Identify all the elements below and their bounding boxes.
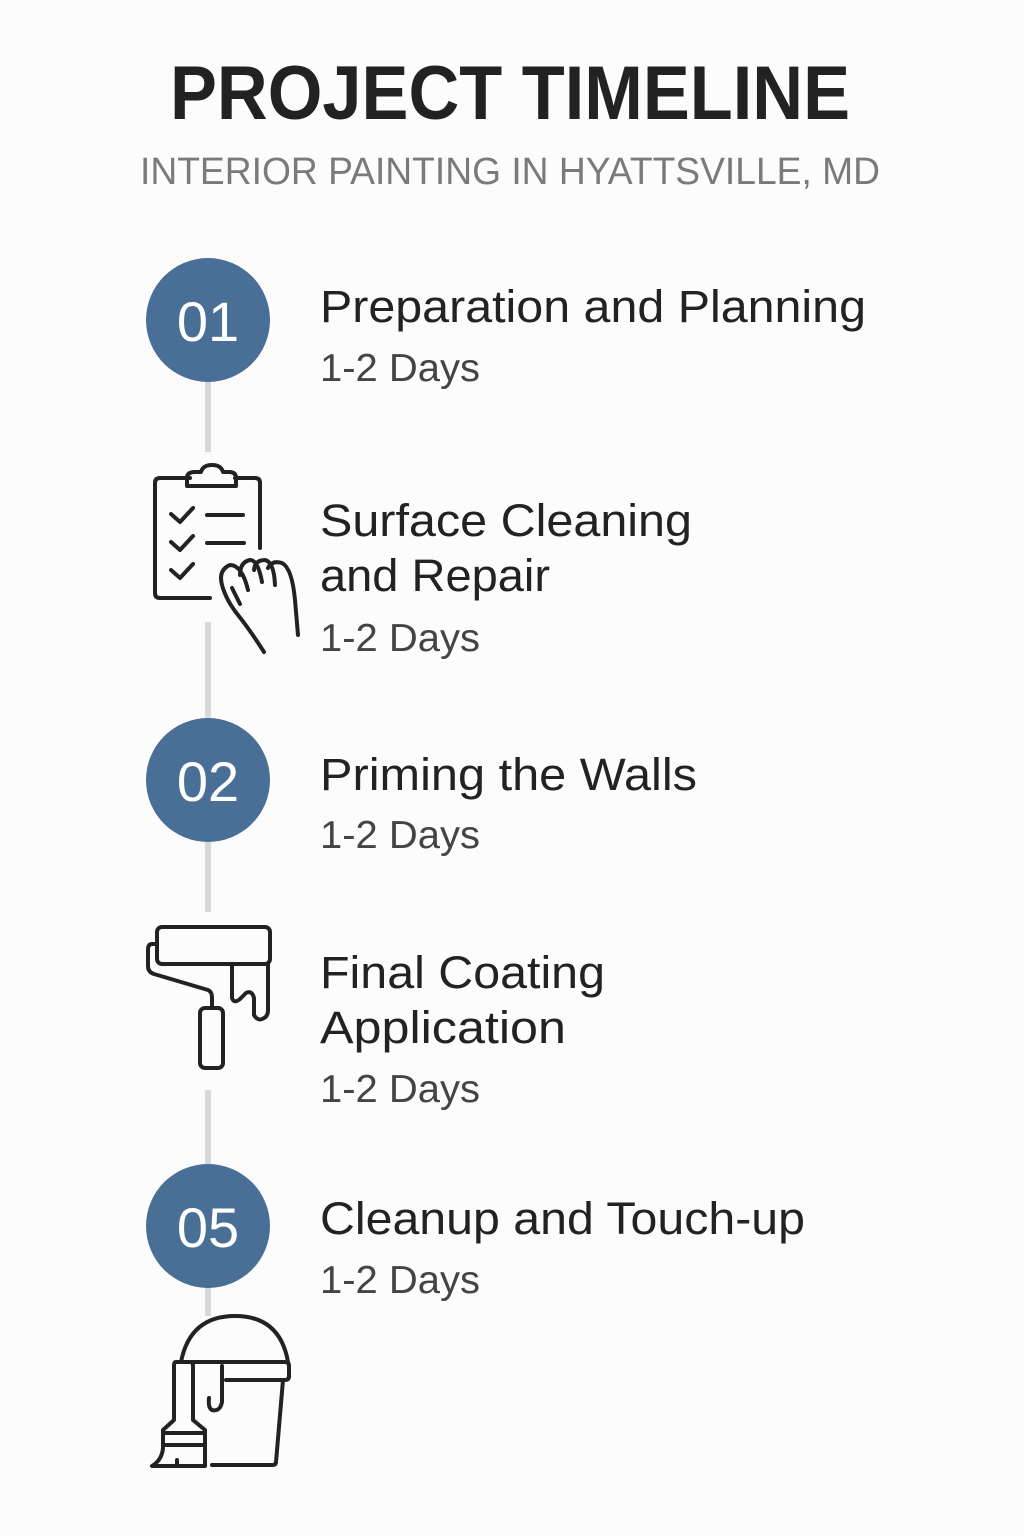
step 03 text: Final Coating Application <box>320 947 605 1111</box>
step 02 text: Surface Cleaning and Repair: and Repair <box>320 550 550 601</box>
step 02 text: Surface Cleaning and Repair <box>320 495 692 660</box>
step 02 text: Priming the Walls: Priming the Walls <box>320 749 697 800</box>
step 02 text: Priming the Walls: 1-2 Days <box>320 814 480 857</box>
timeline connector lines <box>205 380 211 1316</box>
step 05 text: Cleanup and Touch-up <box>320 1193 805 1244</box>
step 02 text: Surface Cleaning and Repair: Surface Cleaning <box>320 495 692 546</box>
title: PROJECT TIMELINE <box>170 51 850 136</box>
step 01 badge: 01 <box>177 290 239 353</box>
step 03 text: Final Coating Application: Application <box>320 1002 566 1053</box>
step 05 text: 1-2 Days <box>320 1259 480 1302</box>
icon: bucket and brush <box>152 1316 289 1466</box>
subtitle: INTERIOR PAINTING IN HYATTSVILLE, MD <box>140 151 880 193</box>
step 01 badge <box>146 258 270 382</box>
step 05 text <box>320 1193 805 1302</box>
step 01 text <box>320 281 866 390</box>
step 05 badge: 05 <box>177 1196 239 1259</box>
step 01 text: 1-2 Days <box>320 347 480 390</box>
step 05 badge <box>146 1164 270 1288</box>
step 02 badge: 02 <box>177 750 239 813</box>
step 02 text: Priming the Walls <box>320 749 697 857</box>
step 01 text: Preparation and Planning <box>320 281 866 332</box>
icon: paint roller <box>148 927 270 1068</box>
step 03 text: Final Coating Application: Final Coating <box>320 947 605 998</box>
step 02 badge <box>146 718 270 842</box>
icon: clipboard with hand <box>155 465 298 652</box>
step 03 text: Final Coating Application: 1-2 Days <box>320 1068 480 1111</box>
step 02 text: Surface Cleaning and Repair: 1-2 Days <box>320 617 480 660</box>
